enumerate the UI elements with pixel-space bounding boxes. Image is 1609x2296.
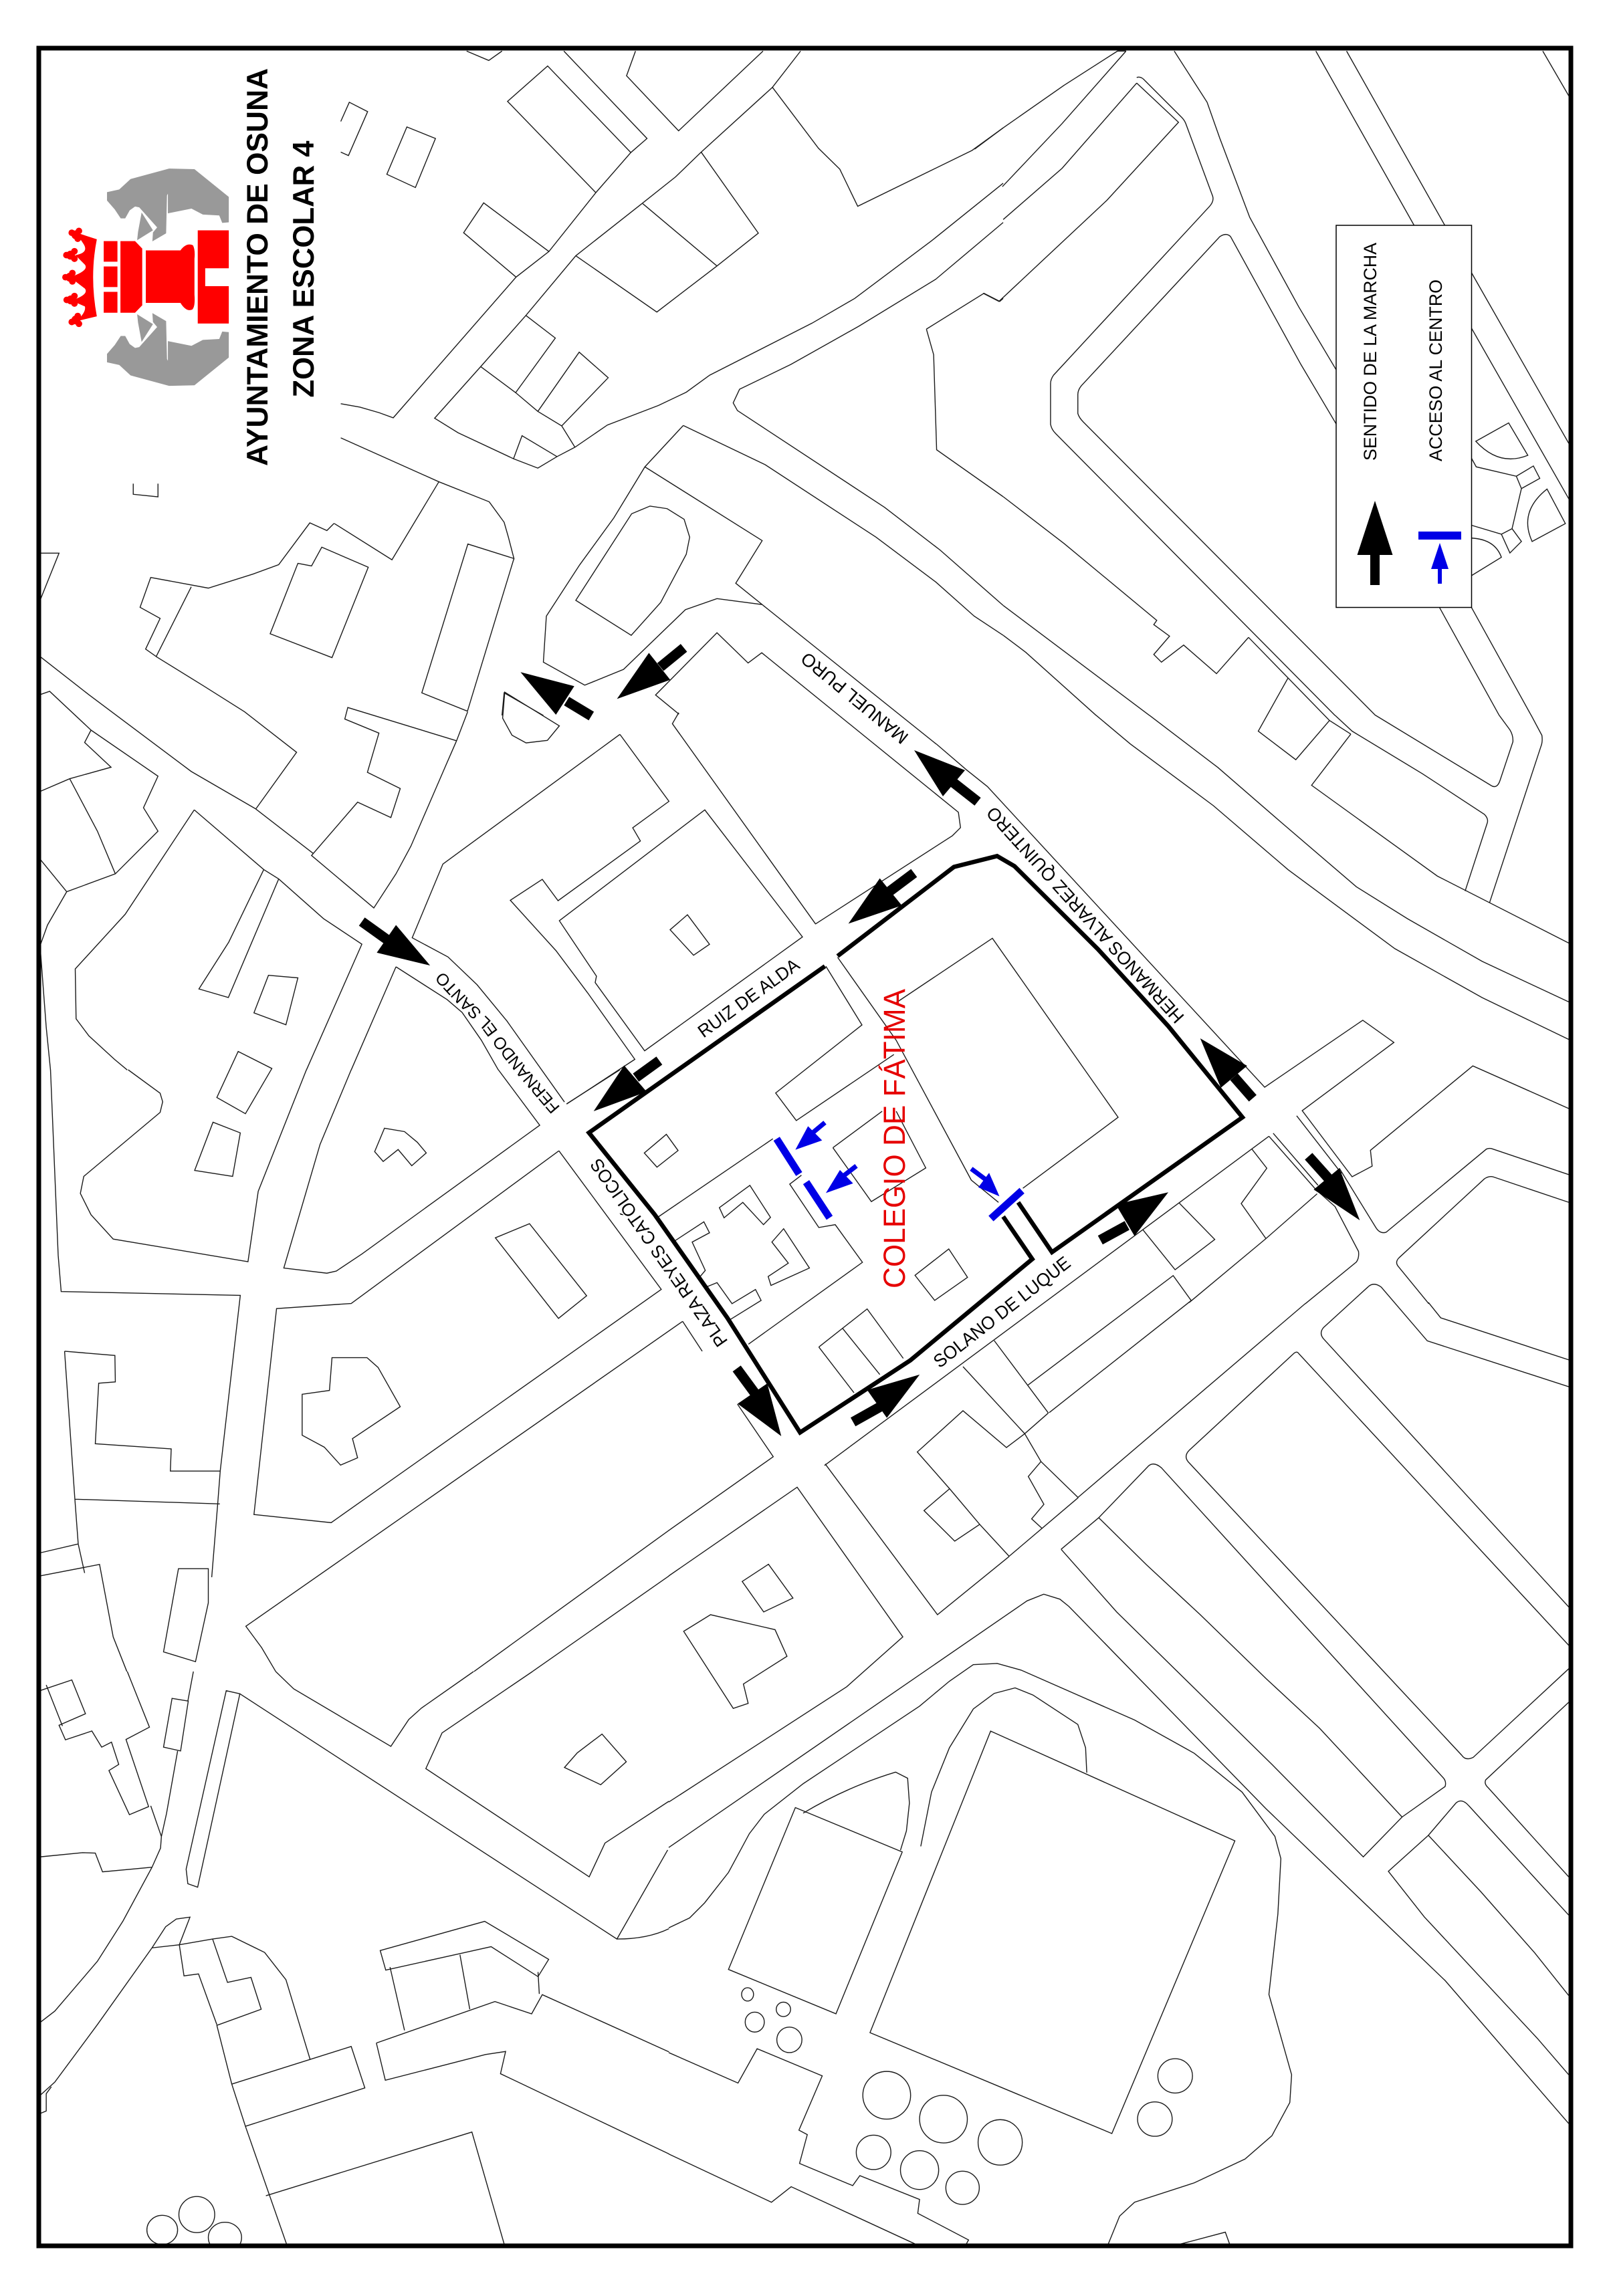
subtitle: Zona Escolar 4: ZONA ESCOLAR 4 xyxy=(288,140,320,397)
street label: Hermanos Alvarez Quintero: HERMANOS ALVAREZ QUINTERO xyxy=(982,803,1188,1027)
traffic direction arrow: east junction xyxy=(1309,1156,1360,1220)
crest: grey lions xyxy=(107,168,229,386)
traffic direction arrows: west streets xyxy=(362,648,684,965)
coat of arms of Osuna xyxy=(62,168,229,386)
legend panel xyxy=(1336,225,1471,607)
street label: Ruiz de Alda: RUIZ DE ALDA xyxy=(694,955,803,1042)
blue access arrows xyxy=(795,1123,999,1196)
map sector: east xyxy=(825,637,1569,1466)
street label: Plaza Reyes Catolicos: PLAZA REYES CATÓLICOS xyxy=(586,1155,732,1351)
legend label: school access: ACCESO AL CENTRO xyxy=(1426,279,1446,461)
crest: red tower and crown xyxy=(62,228,229,327)
street label: Fernando el Santo: FERNANDO EL SANTO xyxy=(437,973,560,1114)
school route perimeter xyxy=(589,856,1243,1432)
legend icon: black arrow xyxy=(1358,501,1392,585)
map sector: south west xyxy=(40,1052,702,1672)
map sector: north east xyxy=(974,51,1569,715)
traffic direction arrows around the school xyxy=(594,873,1253,1436)
traffic direction arrow: Manuel Puro xyxy=(914,750,978,802)
street label: Manuel Puro: MANUEL PURO xyxy=(797,648,912,748)
map sector: south east with sports courts and trees xyxy=(669,1404,1569,2245)
map sector: north centre xyxy=(334,51,1003,924)
map sector: school buildings xyxy=(644,915,1118,1393)
map sector: buildings south of Solano de Luque xyxy=(918,1341,1078,1557)
school name label: COLEGIO DE FÁTIMA xyxy=(877,989,911,1288)
map sector: west xyxy=(40,483,816,1104)
legend label: direction of travel: SENTIDO DE LA MARCHA xyxy=(1360,243,1380,461)
access bars to the school xyxy=(776,1139,1022,1219)
street label: Solano de Luque: SOLANO DE LUQUE xyxy=(930,1252,1074,1372)
map sector: south east blocks xyxy=(1028,1276,1570,1759)
legend icon: blue access bar and arrow xyxy=(1418,532,1461,584)
title: Ayuntamiento de Osuna: AYUNTAMIENTO DE OSUNA xyxy=(241,68,274,466)
map sector: lower west xyxy=(40,1672,669,2253)
